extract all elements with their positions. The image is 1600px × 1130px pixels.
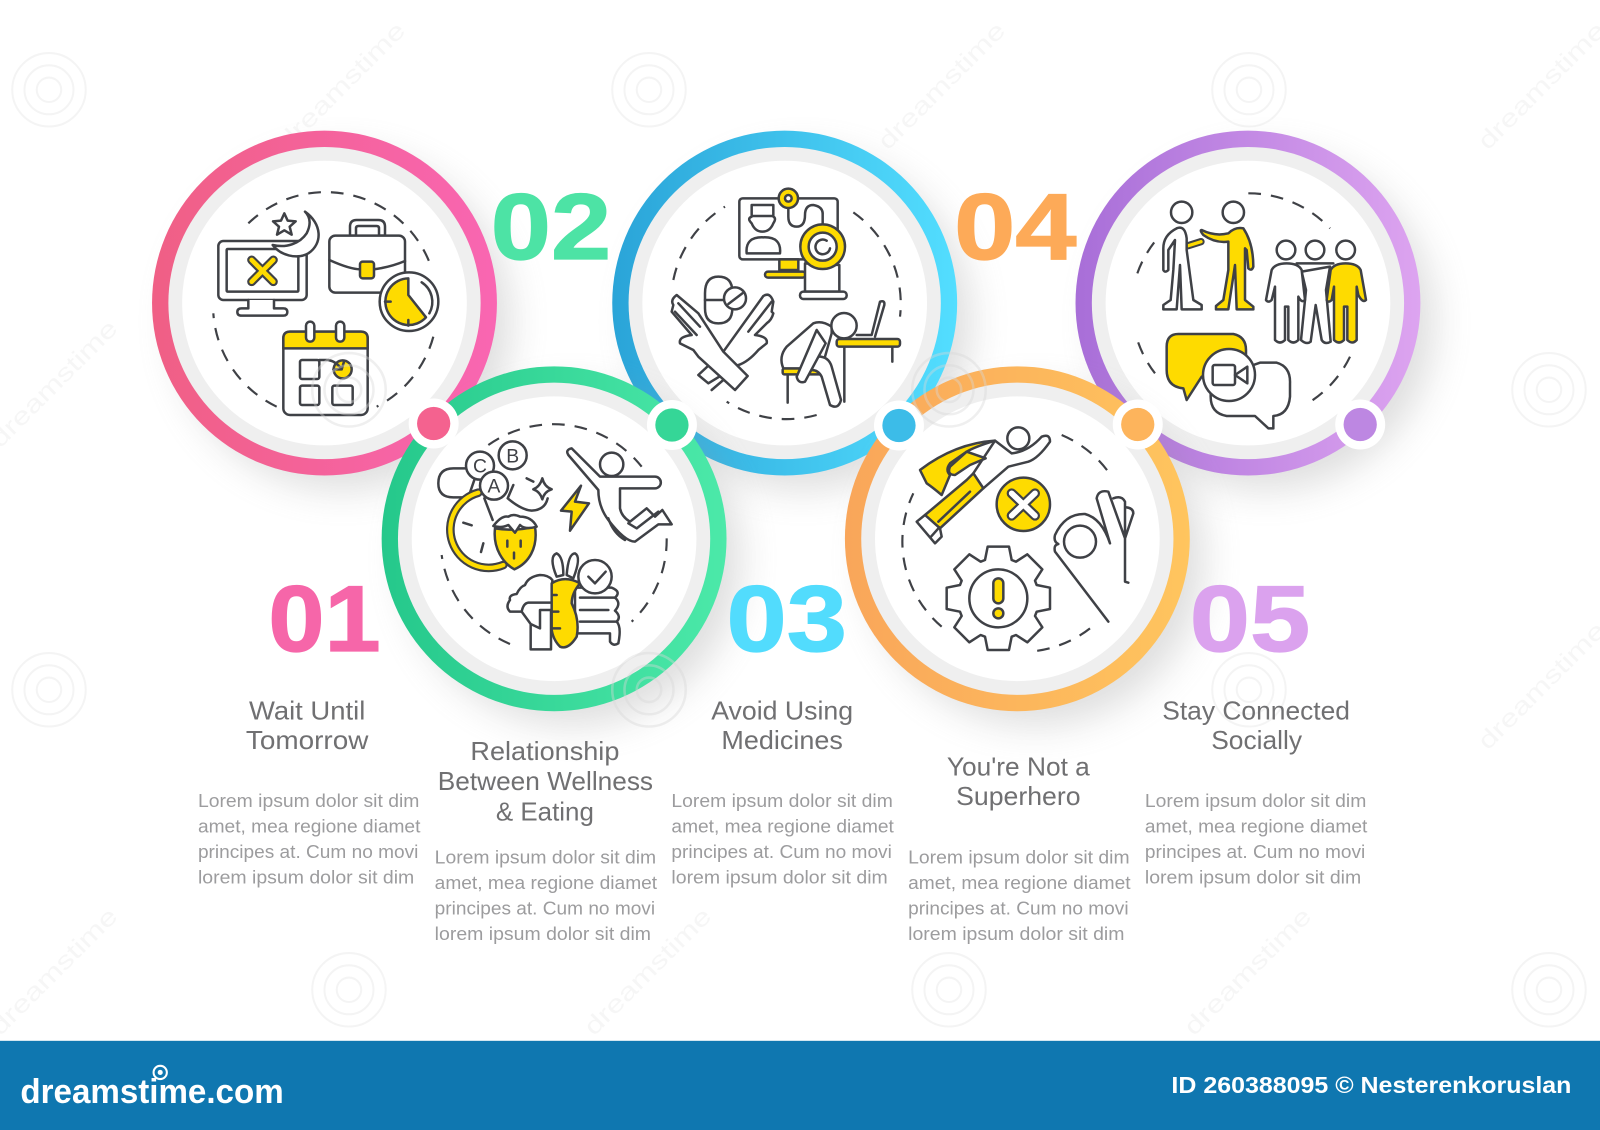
body text 01: amet, mea regione diamet xyxy=(198,816,420,837)
body text 04: principes at. Cum no movi xyxy=(908,897,1129,918)
heading 02: Relationship xyxy=(470,738,619,766)
panel: circle 02 xyxy=(382,366,741,726)
body text 02: principes at. Cum no movi xyxy=(435,897,655,918)
body text 05: Lorem ipsum dolor sit dim xyxy=(1145,790,1366,811)
watermark pattern: dreamstime xyxy=(1473,617,1600,755)
number 05: 05 xyxy=(1190,566,1310,671)
credit text: ID 260388095 © Nesterenkoruslan xyxy=(1171,1072,1571,1098)
body text 05: lorem ipsum dolor sit dim xyxy=(1145,867,1361,888)
watermark spirals over the circles xyxy=(312,353,986,727)
icon: late work, monitor, briefcase, calendar xyxy=(213,192,438,415)
watermark pattern: dreamstime xyxy=(579,903,717,1041)
icon: vitamins, energy, healthy food: B xyxy=(506,446,519,467)
body text 03: principes at. Cum no movi xyxy=(671,841,892,862)
heading 05 xyxy=(1162,697,1350,755)
body text 05: amet, mea regione diamet xyxy=(1145,816,1367,837)
watermark pattern: dreamstime xyxy=(873,17,1011,155)
heading 05: Stay Connected xyxy=(1162,697,1350,725)
heading 04: You're Not a xyxy=(947,754,1091,782)
icon: vitamins, energy, healthy food: C xyxy=(473,456,487,477)
heading 02: & Eating xyxy=(496,798,594,826)
dot: orange xyxy=(1113,399,1163,449)
watermark pattern: dreamstime xyxy=(273,17,411,155)
icon: superhero crossed, gear, ok hand xyxy=(902,427,1133,652)
body text 03: Lorem ipsum dolor sit dim xyxy=(671,790,893,811)
panel: circle 05 xyxy=(1076,131,1435,490)
body text 04: amet, mea regione diamet xyxy=(908,872,1131,893)
dot: pink xyxy=(409,398,459,448)
body text 02 xyxy=(435,846,657,944)
icon: people and video chat xyxy=(1137,193,1366,428)
dot: purple xyxy=(1335,399,1385,449)
panel: circle 01 xyxy=(152,131,511,490)
heading 03: Avoid Using xyxy=(711,697,853,725)
body text 02: amet, mea regione diamet xyxy=(435,872,657,893)
number 04: 04 xyxy=(954,174,1077,279)
dot: green xyxy=(647,400,697,450)
body text 02: lorem ipsum dolor sit dim xyxy=(435,923,651,944)
body text 04: Lorem ipsum dolor sit dim xyxy=(908,846,1130,867)
body text 03: lorem ipsum dolor sit dim xyxy=(671,867,888,888)
body text 03: amet, mea regione diamet xyxy=(671,816,894,837)
body text 05 xyxy=(1145,790,1367,888)
heading 01: Tomorrow xyxy=(246,727,369,755)
body text 02: Lorem ipsum dolor sit dim xyxy=(435,846,656,867)
icon: telehealth, no pills, exhausted worker xyxy=(672,189,901,419)
heading 04: Superhero xyxy=(956,783,1081,811)
footer bar xyxy=(0,1041,1600,1130)
logo: dreamstime: dreamstime.com xyxy=(20,1073,284,1111)
heading 02 xyxy=(438,738,653,826)
heading 03 xyxy=(711,697,853,755)
panel: circle 03 xyxy=(612,131,971,490)
watermark pattern: dreamstime xyxy=(1179,903,1317,1041)
number 02: 02 xyxy=(491,174,611,279)
watermark pattern: dreamstime xyxy=(1473,17,1600,155)
dot: blue xyxy=(874,401,924,451)
heading 02: Between Wellness xyxy=(438,768,653,796)
heading 03: Medicines xyxy=(721,727,843,755)
body text 01: Lorem ipsum dolor sit dim xyxy=(198,790,419,811)
heading 05: Socially xyxy=(1211,727,1302,755)
number 01: 01 xyxy=(268,566,381,671)
body text 01: lorem ipsum dolor sit dim xyxy=(198,867,414,888)
heading 01: Wait Until xyxy=(249,697,365,725)
panel: circle 04 xyxy=(845,366,1204,726)
heading 01 xyxy=(246,697,369,755)
number 03: 03 xyxy=(727,566,847,671)
body text 04 xyxy=(908,846,1131,944)
body text 03 xyxy=(671,790,894,888)
heading 04 xyxy=(947,754,1091,811)
connector dots xyxy=(409,398,1385,451)
icon: vitamins, energy, healthy food: A xyxy=(488,477,501,498)
body text 01 xyxy=(198,790,420,888)
body text 04: lorem ipsum dolor sit dim xyxy=(908,923,1124,944)
body text 05: principes at. Cum no movi xyxy=(1145,841,1365,862)
icon: vitamins, energy, healthy food xyxy=(438,424,672,649)
body text 01: principes at. Cum no movi xyxy=(198,841,418,862)
